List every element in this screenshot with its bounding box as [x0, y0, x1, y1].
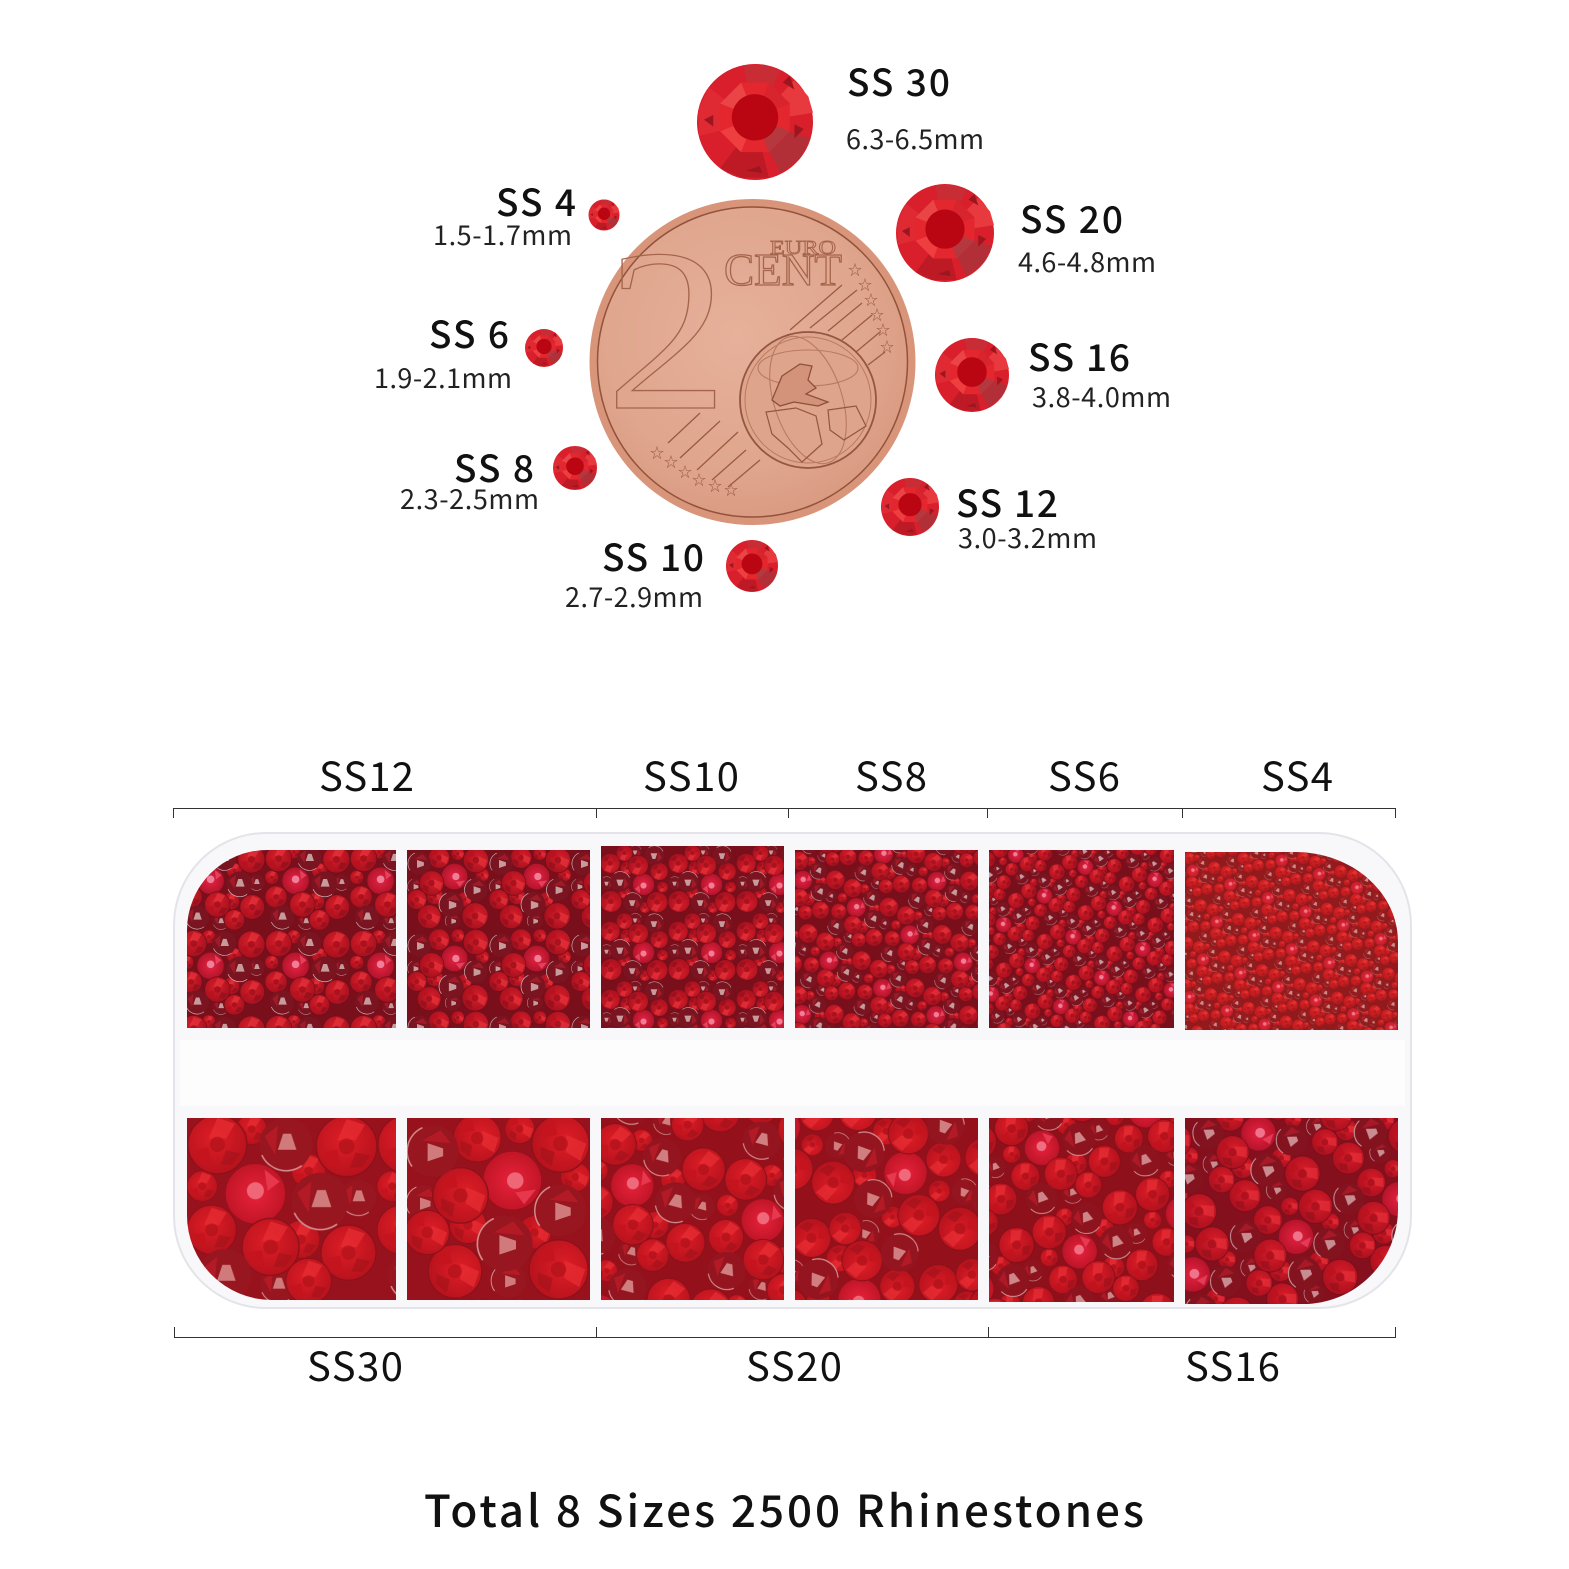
- coin: 2 euro cent: 2: [606, 202, 728, 459]
- top size labels with bracket: SS10: [643, 745, 739, 803]
- label: SS 12: [956, 474, 1097, 556]
- label: SS 4: SS 4: [496, 173, 576, 227]
- label: SS 10: SS 10: [602, 528, 704, 582]
- coin: 2 euro cent: ☆: [678, 464, 692, 480]
- compartment: SS8: [795, 850, 978, 1028]
- coin: 2 euro cent: ☆: [692, 472, 706, 488]
- bottom size labels with bracket: [174, 1327, 1396, 1393]
- coin: 2 euro cent: [590, 199, 916, 525]
- coin: 2 euro cent: ☆: [848, 262, 862, 278]
- rhinestone: SS 6: [525, 329, 563, 367]
- rhinestone: SS 16: [935, 338, 1009, 412]
- coin: 2 euro cent: ☆: [876, 322, 890, 338]
- compartment: SS30: [407, 1118, 590, 1300]
- rhinestone: SS 20: [896, 184, 994, 282]
- compartment: SS6: [989, 850, 1174, 1028]
- compartment: SS16: [989, 1118, 1174, 1302]
- compartment: SS16: [1185, 1118, 1398, 1304]
- label: SS 10: 2.7-2.9mm: [565, 576, 703, 615]
- rhinestone: SS 30: [697, 64, 813, 180]
- coin: 2 euro cent: CENT: [724, 244, 842, 295]
- bottom size labels with bracket: SS16: [1185, 1335, 1280, 1393]
- rhinestone: SS 10: [726, 540, 778, 592]
- coin: 2 euro cent: ☆: [650, 445, 664, 461]
- rhinestone: SS 12: [881, 478, 939, 536]
- label: SS 30: 6.3-6.5mm: [846, 118, 984, 157]
- rhinestone: SS 4: [588, 200, 620, 230]
- label: SS 6: [374, 305, 512, 396]
- compartment: SS12: [187, 850, 396, 1028]
- label: SS 30: SS 30: [847, 53, 950, 107]
- coin: 2 euro cent: ☆: [870, 307, 884, 323]
- label: SS 8: SS 8: [454, 439, 534, 493]
- tray body: [174, 833, 1411, 1308]
- compartment: SS20: [795, 1118, 978, 1300]
- bottom size labels with bracket: SS20: [746, 1335, 842, 1393]
- top size labels with bracket: [174, 745, 1396, 818]
- label: SS 20: [1018, 190, 1156, 280]
- compartment: SS20: [601, 1118, 784, 1300]
- compartment row: large stones: [187, 1118, 1398, 1304]
- top size labels with bracket: SS12: [319, 745, 414, 803]
- compartment: SS30: [187, 1118, 396, 1300]
- top size labels with bracket: SS6: [1048, 745, 1120, 803]
- coin: 2 euro cent: ☆: [880, 339, 894, 355]
- label: SS 16: 3.8-4.0mm: [1032, 376, 1171, 415]
- top size labels with bracket: SS8: [855, 745, 927, 803]
- label: SS 16: [1028, 328, 1171, 415]
- rhinestone: SS 8: [553, 446, 597, 490]
- label: SS 4: 1.5-1.7mm: [433, 214, 572, 253]
- coin: 2 euro cent: ☆: [724, 482, 738, 498]
- bottom size labels with bracket: SS30: [307, 1335, 403, 1393]
- label: SS 10: [565, 528, 704, 615]
- coin: 2 euro cent: ☆: [664, 454, 678, 470]
- coin: 2 euro cent: ☆: [858, 277, 872, 293]
- label: SS 20: 4.6-4.8mm: [1018, 241, 1156, 280]
- coin: 2 euro cent: EURO: [770, 237, 836, 259]
- compartment row: small stones: [187, 846, 1398, 1030]
- coin: 2 euro cent: ☆: [708, 478, 722, 494]
- label: SS 8: [400, 439, 539, 517]
- compartment: SS12: [407, 850, 590, 1028]
- title: Total 8 Sizes 2500 Rhinestones: [424, 1476, 1144, 1540]
- label: SS 20: SS 20: [1020, 190, 1123, 244]
- rhinestone storage tray: [174, 833, 1411, 1308]
- coin: 2 euro cent: ☆: [864, 292, 878, 308]
- top size labels with bracket: SS4: [1261, 745, 1333, 803]
- label: SS 6: 1.9-2.1mm: [374, 357, 512, 396]
- size chart: coin with rhinestones: [374, 53, 1171, 615]
- label: SS 30: [846, 53, 984, 157]
- label: SS 16: SS 16: [1028, 328, 1130, 382]
- label: SS 8: 2.3-2.5mm: [400, 478, 539, 517]
- compartment: SS10: [601, 846, 784, 1028]
- label: SS 12: SS 12: [956, 474, 1058, 528]
- compartment: SS4: [1185, 852, 1398, 1030]
- label: SS 6: SS 6: [429, 305, 509, 359]
- label: SS 12: 3.0-3.2mm: [958, 517, 1097, 556]
- label: SS 4: [433, 173, 576, 253]
